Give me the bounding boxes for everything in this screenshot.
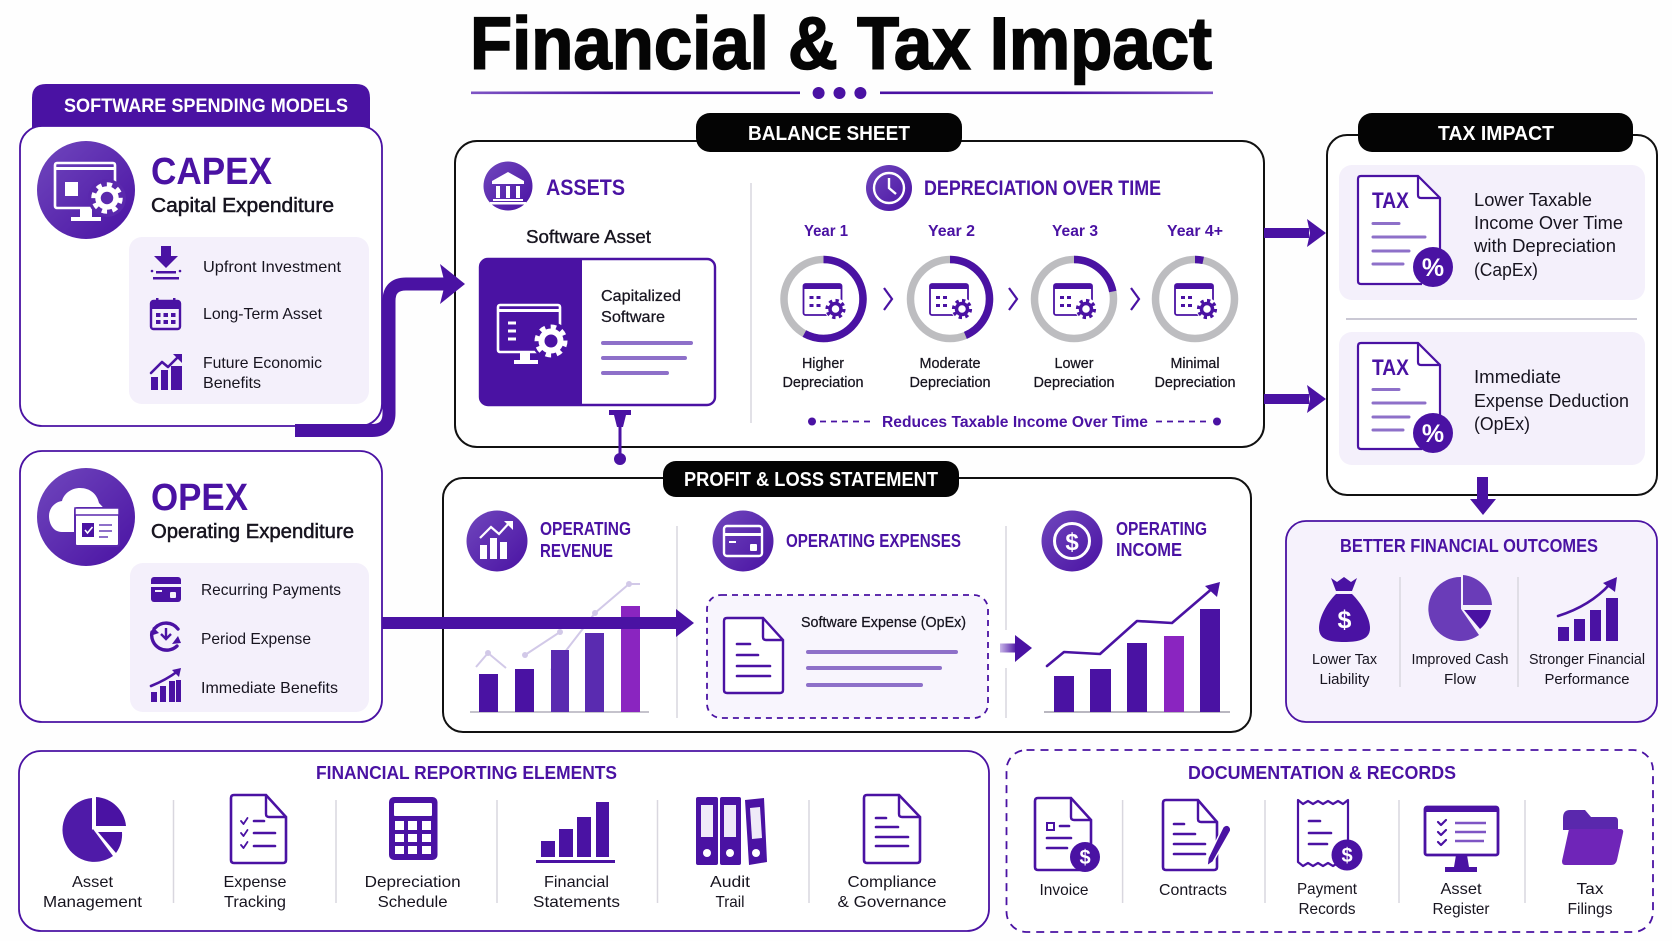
icon: compliance document (864, 795, 920, 863)
panel: profit and loss statement (443, 461, 1251, 732)
icon: capex monitor and gear (37, 141, 135, 239)
operating income heading: OPERATING (1116, 519, 1207, 539)
arrow: opex to profit and loss (382, 609, 694, 637)
financial statements label (533, 874, 620, 911)
compliance and governance label (838, 874, 947, 911)
year 1: Depreciation (782, 375, 864, 391)
icon: download (151, 246, 181, 280)
compliance and governance label: Compliance (848, 874, 937, 891)
reduces taxable income note: Reduces Taxable Income Over Time (882, 414, 1148, 431)
year 1 (782, 223, 864, 391)
year 2 (910, 223, 990, 391)
operating revenue heading (540, 519, 631, 561)
expense tracking label (224, 874, 287, 911)
opex subheading: Operating Expenditure (151, 521, 354, 543)
icon: money bag: $ (1338, 606, 1352, 634)
balance sheet heading: BALANCE SHEET (748, 123, 910, 145)
connector: balance sheet to profit and loss (609, 410, 631, 465)
capitalized software card (480, 259, 715, 405)
invoice label: Invoice (1040, 882, 1089, 899)
tax filings label: Filings (1568, 901, 1612, 918)
arrow: profit and loss to opex tax (1264, 385, 1326, 413)
icon: invoice (1035, 798, 1100, 872)
expense tracking label: Expense (224, 874, 287, 891)
icon: expense document (724, 618, 783, 693)
financial statements label: Statements (533, 894, 620, 911)
profit and loss heading (663, 461, 959, 497)
tax impact heading (1358, 113, 1633, 152)
outcomes heading: BETTER FINANCIAL OUTCOMES (1340, 536, 1598, 556)
arrow: capex to balance sheet (295, 264, 465, 430)
capex tax text: (CapEx) (1474, 259, 1538, 280)
asset register label: Register (1432, 901, 1490, 918)
audit trail label: Audit (710, 874, 751, 891)
opex tax row (1339, 332, 1645, 465)
icon: operating income (1042, 510, 1102, 572)
year 3: Lower (1054, 356, 1094, 372)
stronger financial performance: Stronger Financial (1529, 651, 1645, 668)
assets heading: ASSETS (546, 175, 625, 200)
panel: balance sheet (455, 113, 1264, 447)
opex benefits list (130, 563, 369, 712)
icon: financial statements chart (536, 802, 615, 863)
long-term asset: Long-Term Asset (203, 306, 323, 323)
opex heading: OPEX (151, 477, 249, 519)
profit and loss heading: PROFIT & LOSS STATEMENT (684, 469, 938, 491)
arrow: tax impact to outcomes (1470, 477, 1496, 515)
software expense box (707, 595, 988, 718)
title divider (471, 87, 1213, 99)
capex benefits list (129, 237, 369, 404)
audit trail label: Trail (716, 894, 744, 911)
asset management label (43, 874, 143, 911)
opex tax text (1474, 366, 1629, 434)
panel: software spending models tab (32, 84, 370, 128)
period expense: Period Expense (201, 631, 311, 648)
icon: calendar (151, 298, 180, 329)
capex tax text: with Depreciation (1473, 235, 1616, 256)
stronger financial performance (1529, 651, 1645, 688)
contracts label: Contracts (1159, 882, 1227, 899)
icon: operating income: $ (1065, 529, 1079, 556)
lower tax liability: Lower Tax (1312, 651, 1377, 668)
icon: audit binders (696, 797, 767, 865)
operating revenue heading: REVENUE (540, 541, 613, 561)
icon: tax document: % (1422, 420, 1444, 448)
reporting heading: FINANCIAL REPORTING ELEMENTS (316, 763, 617, 783)
opex tax text: Expense Deduction (1474, 390, 1629, 411)
year 4 plus: Year 4+ (1167, 223, 1223, 240)
asset register label (1432, 881, 1490, 918)
compliance and governance label: & Governance (838, 894, 947, 911)
icon: asset management pie (62, 797, 126, 862)
panel: opex (20, 451, 382, 722)
financial statements label: Financial (544, 874, 609, 891)
immediate benefits: Immediate Benefits (201, 680, 338, 697)
title: Financial & Tax Impact (470, 2, 1212, 85)
operating revenue heading: OPERATING (540, 519, 631, 539)
software asset label: Software Asset (526, 227, 651, 247)
operating expenses heading: OPERATING EXPENSES (786, 531, 961, 551)
icon: invoice: $ (1079, 847, 1091, 869)
year 2: Moderate (920, 356, 980, 372)
improved cash flow: Improved Cash (1412, 651, 1508, 668)
capex tax row (1339, 165, 1645, 300)
icon: opex cloud and window (37, 468, 135, 566)
capex tax text (1473, 189, 1623, 280)
tax filings label: Tax (1576, 881, 1604, 898)
icon: payment receipt (1298, 800, 1362, 870)
icon: software monitor (498, 305, 570, 364)
icon: cycle (150, 623, 181, 650)
year 3: Depreciation (1034, 375, 1114, 391)
chart: operating income bars (1044, 582, 1230, 713)
audit trail label (710, 874, 751, 911)
arrow: balance sheet to capex tax (1264, 219, 1326, 247)
tax filings label (1568, 881, 1612, 918)
operating income heading (1116, 519, 1207, 560)
icon: pie chart (1428, 575, 1492, 641)
capitalized software label: Capitalized (601, 288, 681, 305)
year 4 plus: Minimal (1170, 356, 1220, 372)
capex subheading: Capital Expenditure (151, 195, 334, 217)
icon: calculator (389, 797, 438, 860)
recurring payments: Recurring Payments (201, 582, 341, 599)
balance sheet heading (696, 113, 962, 152)
lower tax liability (1312, 651, 1377, 688)
panel: better financial outcomes (1286, 521, 1657, 722)
icon: payment receipt: $ (1341, 845, 1353, 867)
software expense label: Software Expense (OpEx) (801, 615, 966, 631)
capex tax text: Income Over Time (1474, 212, 1623, 233)
panel: software spending models tab: SOFTWARE SPENDING MODELS (64, 95, 348, 117)
capex tax text: Lower Taxable (1474, 189, 1592, 210)
payment records label (1297, 881, 1358, 918)
arrow: expenses to income (1000, 635, 1032, 662)
panel: financial reporting elements (19, 751, 989, 931)
improved cash flow (1412, 651, 1508, 688)
improved cash flow: Flow (1444, 671, 1476, 688)
stronger financial performance: Performance (1544, 671, 1630, 688)
expense tracking label: Tracking (224, 894, 286, 911)
depreciation over time heading: DEPRECIATION OVER TIME (924, 177, 1161, 200)
capitalized software card: Software (601, 309, 665, 326)
panel: documentation and records (1006, 750, 1653, 932)
icon: expense checklist (231, 795, 286, 863)
year 2: Depreciation (910, 375, 990, 391)
year 1: Year 1 (804, 223, 848, 240)
icon: growth chart (151, 354, 182, 390)
future economic benefits: Future Economic (203, 355, 322, 372)
documentation heading: DOCUMENTATION & RECORDS (1188, 763, 1456, 783)
capex benefits list: Benefits (203, 375, 261, 392)
year 3: Year 3 (1052, 223, 1098, 240)
icon: operating revenue (466, 510, 528, 572)
capex heading: CAPEX (151, 151, 273, 193)
year 3 (1034, 223, 1114, 391)
reduces taxable income note (808, 414, 1221, 431)
icon: performance chart (1558, 577, 1618, 641)
upfront investment: Upfront Investment (203, 259, 342, 276)
panel: tax impact (1327, 113, 1657, 495)
icon: money bag (1319, 577, 1370, 642)
asset management label: Asset (72, 874, 114, 891)
payment records label: Records (1298, 901, 1356, 918)
icon: asset register monitor (1425, 807, 1498, 872)
icon: operating expenses (712, 510, 774, 572)
depreciation schedule label (365, 874, 461, 911)
asset register label: Asset (1440, 881, 1482, 898)
year 2: Year 2 (928, 223, 975, 240)
icon: bank (484, 162, 532, 210)
icon: tax document: TAX (1372, 355, 1409, 380)
chart: operating revenue bars (470, 581, 649, 713)
year 1: Higher (802, 356, 844, 372)
icon: tax document: % (1422, 254, 1444, 282)
icon: contracts (1163, 800, 1231, 870)
chevrons between years (884, 288, 1139, 310)
icon: payment card (151, 577, 181, 602)
depreciation schedule label: Depreciation (365, 874, 461, 891)
lower tax liability: Liability (1320, 671, 1370, 688)
payment records label: Payment (1297, 881, 1358, 898)
panel: capex (20, 126, 382, 426)
opex tax text: (OpEx) (1474, 413, 1530, 434)
icon: tax document: TAX (1372, 188, 1409, 213)
icon: tax document (1358, 343, 1453, 453)
tax impact heading: TAX IMPACT (1438, 123, 1554, 145)
icon: tax folder (1562, 810, 1623, 865)
opex tax text: Immediate (1474, 366, 1561, 387)
year 4 plus (1154, 223, 1236, 391)
depreciation schedule label: Schedule (378, 894, 448, 911)
asset management label: Management (43, 894, 143, 911)
year 4 plus: Depreciation (1154, 375, 1236, 391)
operating income heading: INCOME (1116, 540, 1182, 560)
icon: clock (866, 165, 912, 211)
icon: immediate chart (151, 668, 181, 702)
icon: tax document (1358, 176, 1453, 287)
